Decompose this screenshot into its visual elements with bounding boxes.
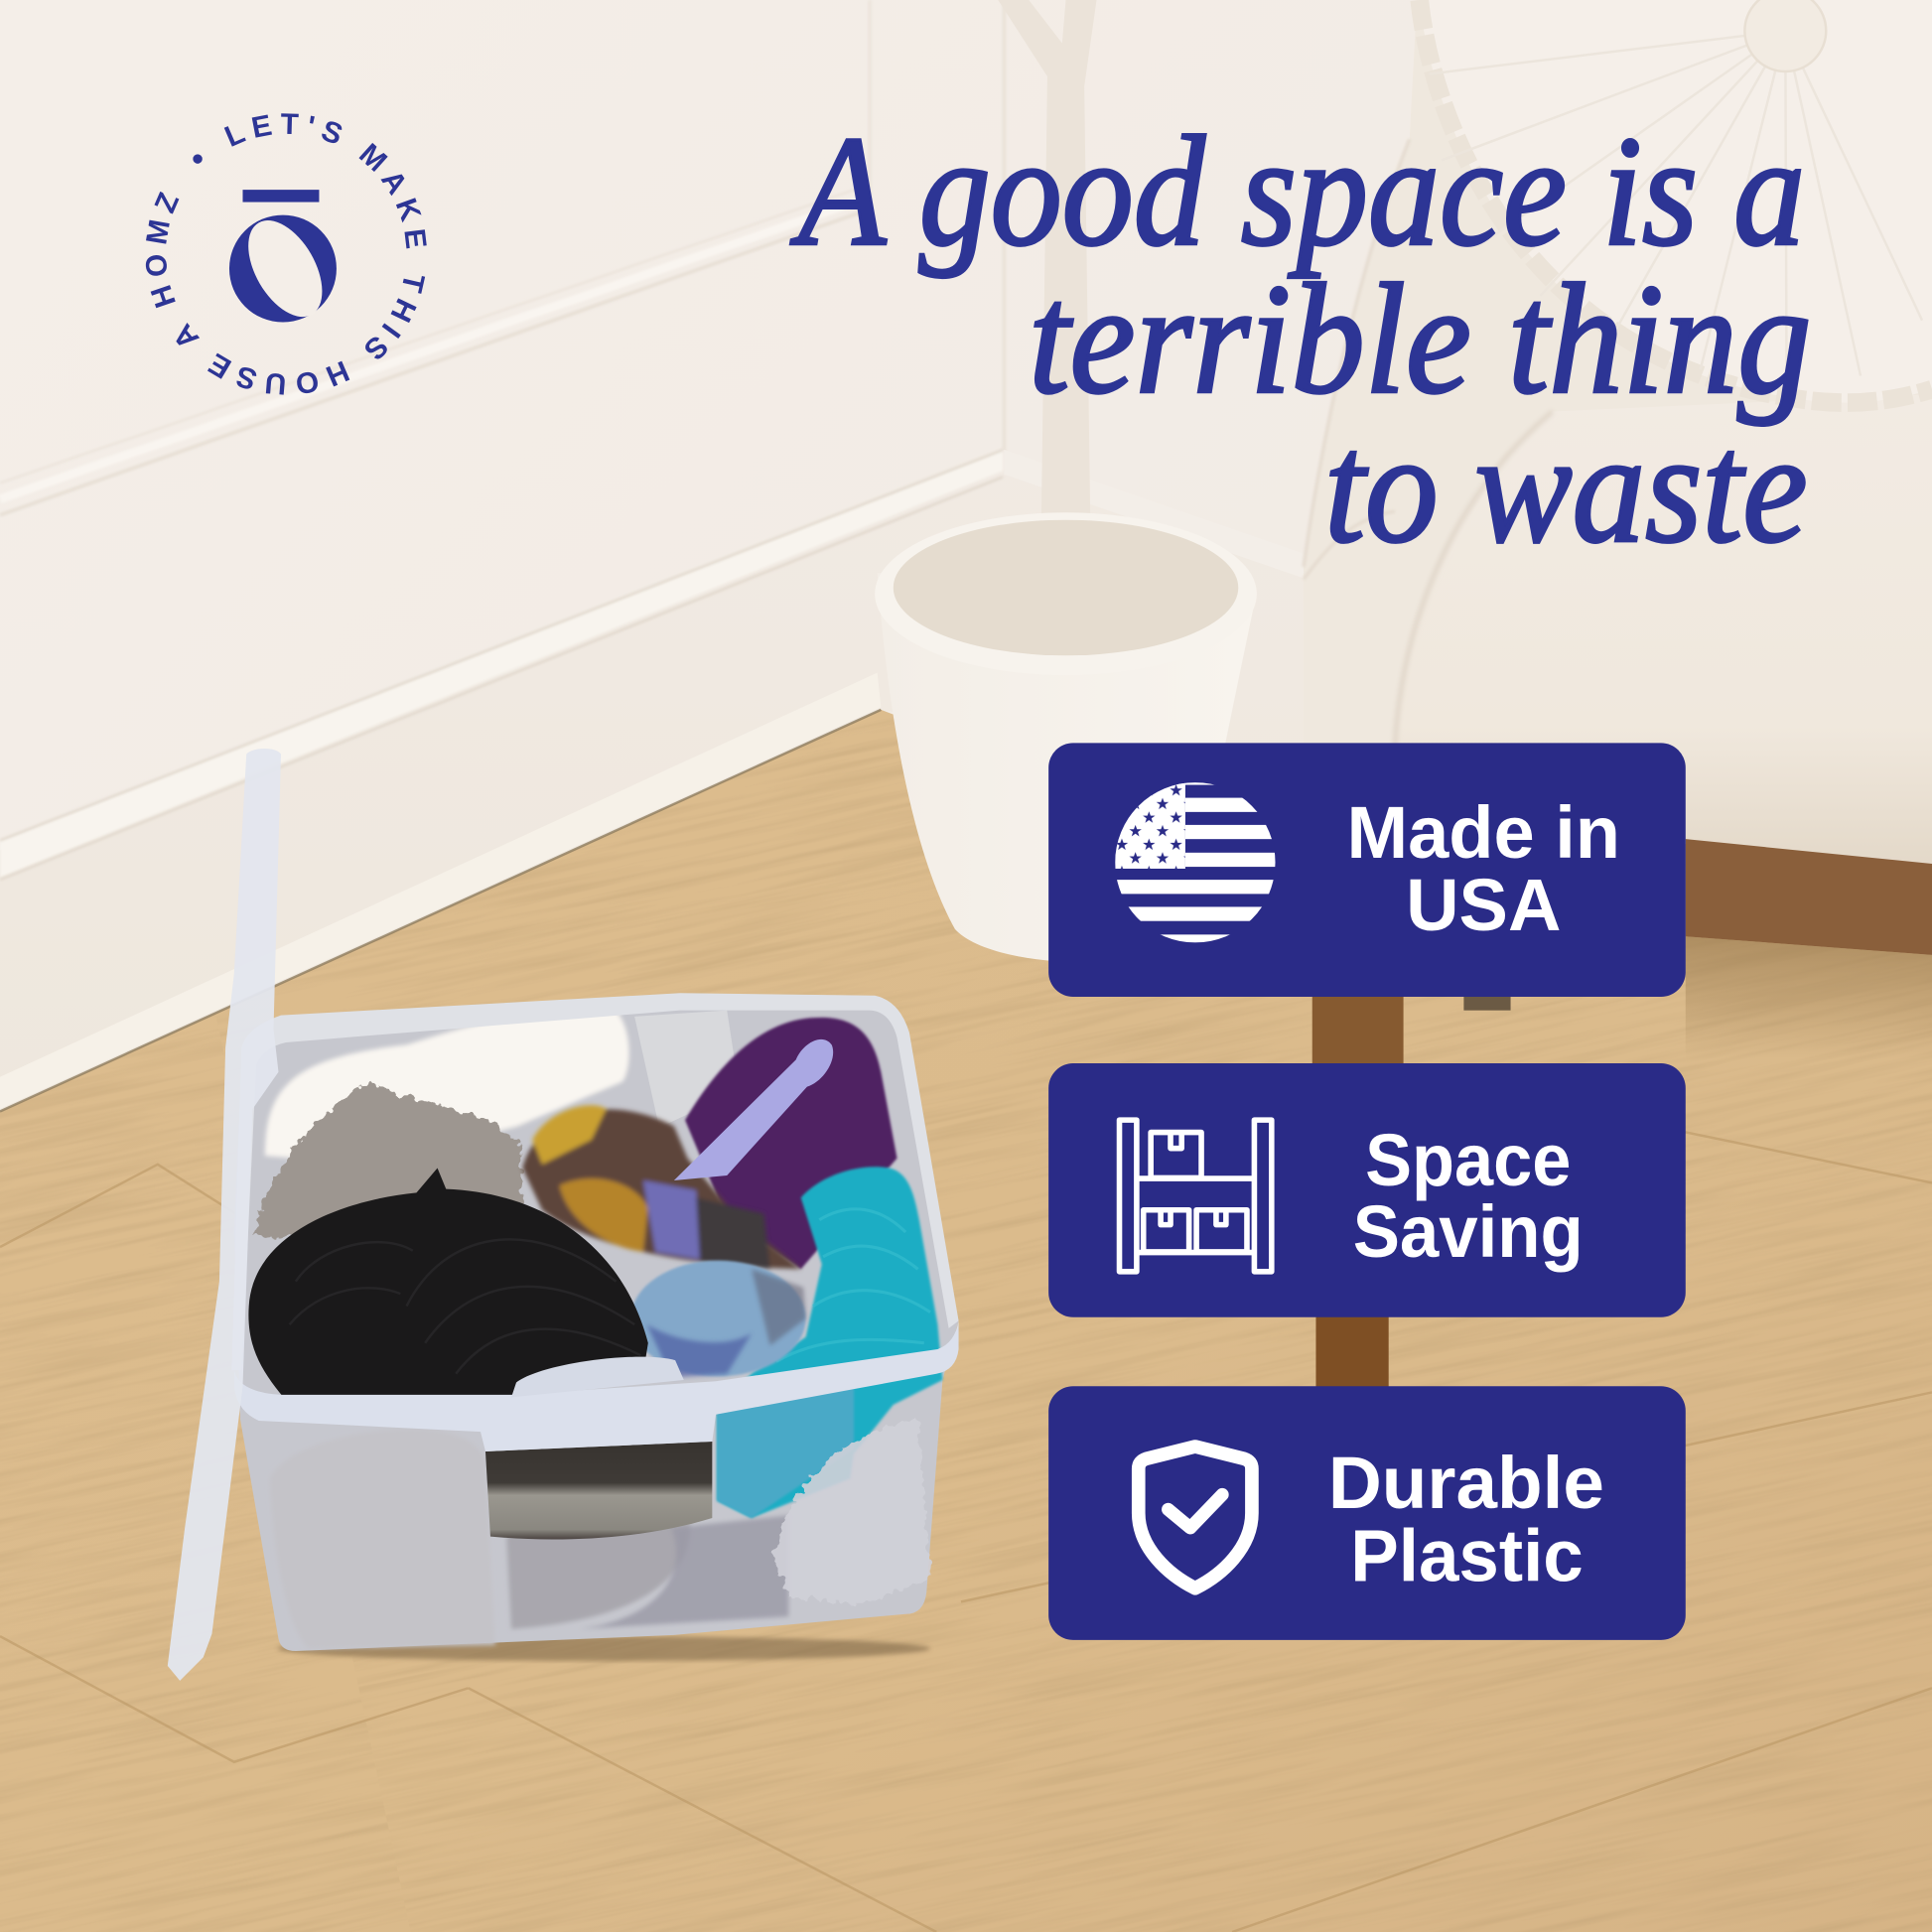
dark gap behind box [579,1516,788,1629]
baseboard [0,450,1307,1111]
wall moldings [0,0,1004,515]
logo badge [145,113,427,395]
chair legs [1312,992,1404,1068]
icon: shield with check [1139,1447,1252,1588]
label: Durable [1328,1442,1604,1524]
front rim [234,1320,959,1451]
chair wood frame [1686,839,1932,955]
letter O mark [229,215,337,323]
macron bar [242,190,319,203]
black yarn strands [290,1239,640,1374]
lower teal yarn [717,1382,854,1518]
label: Made in [1346,791,1620,874]
badge: Space Saving: Saving [1353,1190,1584,1273]
floor shadow [277,1636,930,1661]
front lower grey yarn [270,1429,495,1649]
title [790,104,1811,576]
title: to waste [1324,401,1808,576]
wood floor [0,710,1932,1932]
armchair and pillow [1304,0,1932,1391]
baseboard quarter round [0,673,881,1109]
badge: Durable Plastic: Plastic [1350,1514,1584,1596]
white fuzzy yarn [773,1417,930,1604]
storage box with yarn [168,749,959,1681]
teal yarn [717,1167,942,1518]
badge: Made in USA: USA [1406,864,1561,946]
side and back rim [231,993,959,1370]
label: Space [1365,1119,1571,1201]
slogan separator dot [193,154,203,164]
title: A good space is a [790,104,1805,279]
rear wall detail [634,1011,740,1128]
box back interior [234,996,959,1651]
hinged lid [168,749,281,1681]
seat cushion [1394,394,1932,869]
purple yarn [685,1018,897,1269]
round pillow [1420,0,1932,403]
floor plank seams [0,1072,1932,1932]
grey fluffy yarn [254,1082,522,1244]
plant pot and trunk [875,0,1257,962]
metal handle [485,1442,712,1540]
badge: Durable Plastic [1048,1386,1686,1640]
multicolour skein [522,1105,801,1269]
white yarn [265,1006,629,1165]
black yarn ball [248,1169,648,1399]
badge: Space Saving [1048,1063,1686,1317]
crochet hook [674,1039,833,1180]
icon: storage shelf [1120,1120,1272,1272]
circular slogan: LET'S MAKE THIS HOUSE A HOMZ [145,113,427,395]
latch tab [511,1357,684,1397]
icon: US flag circle [1115,782,1276,942]
chair arm [1304,0,1932,869]
teal strand highlights [776,1209,930,1361]
badge: Made in USA [1048,743,1686,997]
variegated blue yarn [630,1261,806,1376]
title: terrible thing [1029,252,1811,427]
